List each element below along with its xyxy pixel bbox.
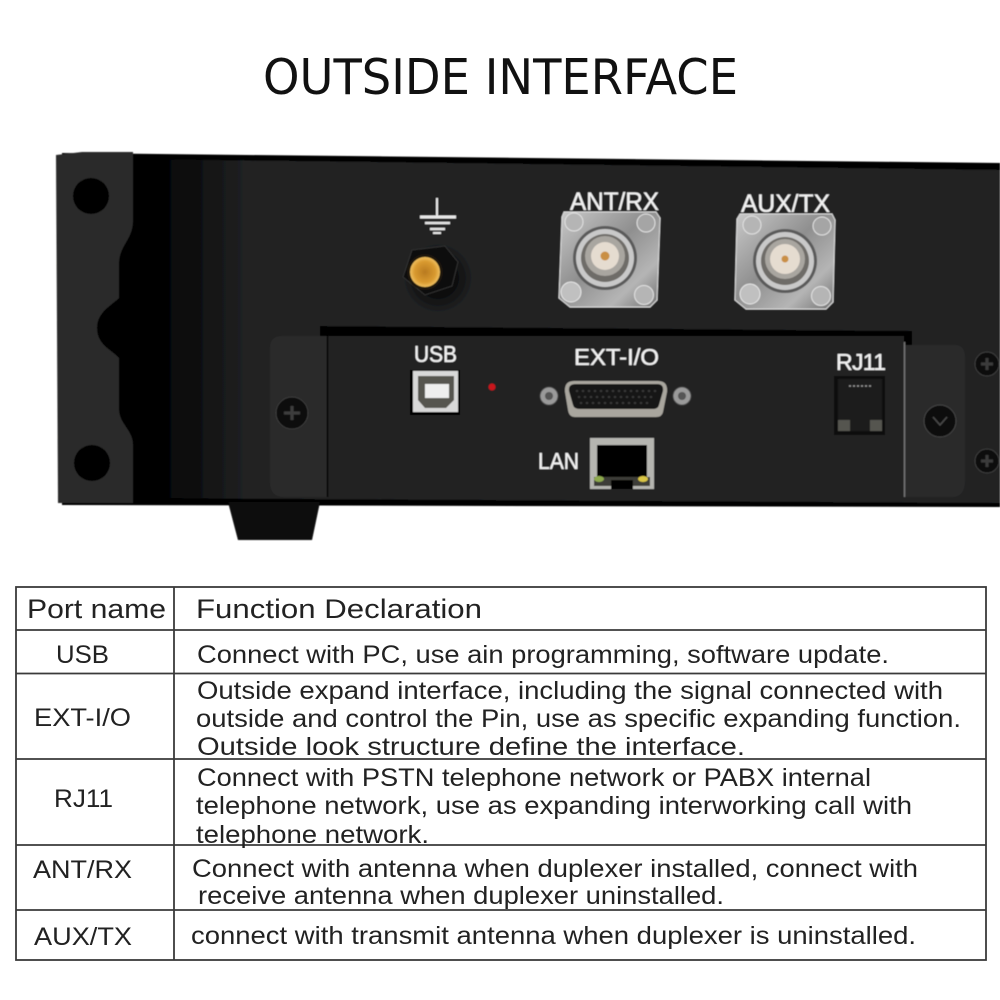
row RJ11: telephone network. xyxy=(196,821,429,849)
row RJ11 xyxy=(54,764,912,849)
ground post xyxy=(402,242,474,314)
row AUX/TX: connect with transmit antenna when duplexer is uninstalled. xyxy=(191,922,916,950)
header row: Port name xyxy=(27,594,166,624)
label EXT-I/O: EXT-I/O xyxy=(574,344,659,370)
label USB: USB xyxy=(414,341,457,367)
row ANT/RX: ANT/RX xyxy=(33,856,132,884)
row RJ11: Connect with PSTN telephone network or PABX internal xyxy=(197,764,871,792)
table xyxy=(16,587,986,960)
RJ11 port xyxy=(834,376,885,435)
foot xyxy=(228,502,320,540)
row RJ11: RJ11 xyxy=(54,785,113,813)
chassis body xyxy=(62,153,1000,507)
row EXT-I/O: EXT-I/O xyxy=(34,704,131,732)
connector AUX/TX xyxy=(735,214,835,309)
table grid xyxy=(16,587,986,960)
module screw left xyxy=(276,397,308,429)
row USB: USB xyxy=(56,641,109,669)
status LED xyxy=(488,384,496,390)
row RJ11: telephone network, use as expanding interworking call with xyxy=(196,792,912,820)
row EXT-I/O xyxy=(34,677,961,761)
title: OUTSIDE INTERFACE xyxy=(263,49,738,106)
row AUX/TX: AUX/TX xyxy=(34,923,132,951)
label AUX/TX: AUX/TX xyxy=(741,190,830,218)
EXT-I/O connector xyxy=(540,381,691,417)
USB port xyxy=(410,370,460,415)
device rear panel xyxy=(56,152,1000,540)
module slot shadow xyxy=(320,326,912,345)
module screw right xyxy=(924,405,956,437)
ground symbol xyxy=(420,198,456,233)
row USB: Connect with PC, use ain programming, software update. xyxy=(197,641,889,669)
rack screw top xyxy=(975,352,999,376)
row ANT/RX: Connect with antenna when duplexer installed, connect with xyxy=(192,855,918,883)
row EXT-I/O: Outside look structure define the interface. xyxy=(197,733,745,761)
label LAN: LAN xyxy=(538,448,579,474)
label RJ11: RJ11 xyxy=(836,349,886,375)
LAN port xyxy=(590,438,654,489)
row EXT-I/O: outside and control the Pin, use as specific expanding function. xyxy=(196,705,961,733)
recessed face xyxy=(133,159,1000,503)
left shadow xyxy=(133,156,250,500)
label ANT/RX: ANT/RX xyxy=(570,188,659,216)
rack screw bottom xyxy=(975,449,999,473)
interface module xyxy=(270,336,965,498)
connector ANT/RX xyxy=(559,212,660,307)
mounting ear xyxy=(56,152,133,503)
header row: Function Declaration xyxy=(196,594,482,624)
header row xyxy=(27,594,482,624)
row EXT-I/O: Outside expand interface, including the signal connected with xyxy=(197,677,943,705)
row ANT/RX xyxy=(33,855,918,910)
row ANT/RX: receive antenna when duplexer uninstalled. xyxy=(198,882,724,910)
